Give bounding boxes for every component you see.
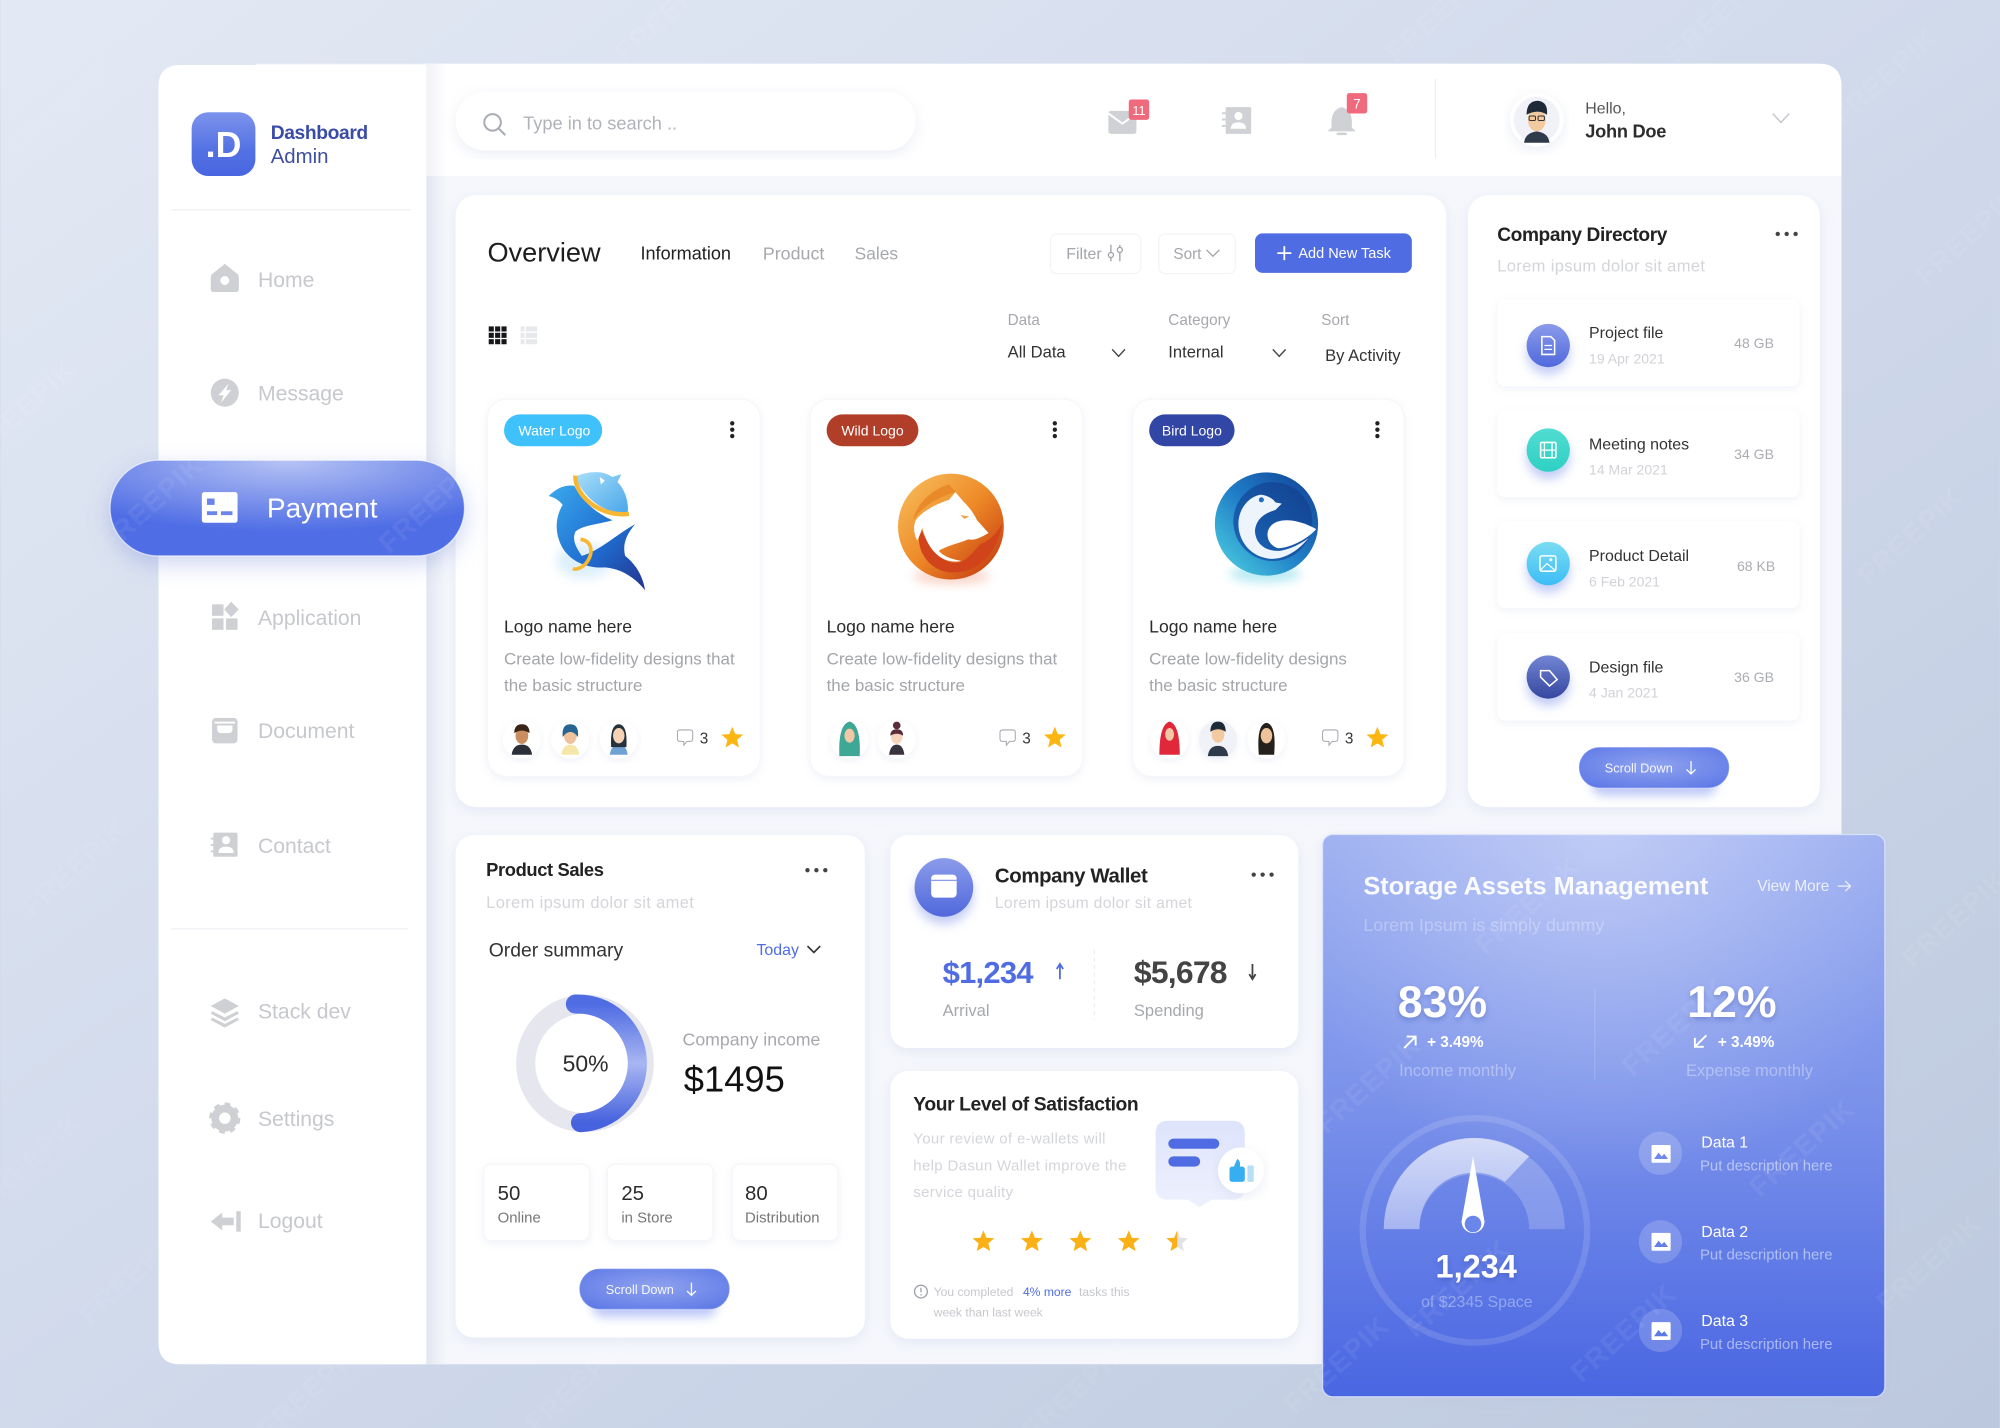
item: project file: [1497, 300, 1799, 386]
watermarks: FREEPIK: [1871, 1207, 1988, 1318]
menu: home: [211, 264, 314, 292]
logo: Admin: [271, 146, 328, 168]
item: meeting notes: 14 Mar 2021: [1589, 461, 1668, 477]
item: design file: [1497, 634, 1799, 720]
category dropdown: Category: [1168, 312, 1231, 329]
stat: expense: Expense monthly: [1686, 1061, 1814, 1080]
item: project file: 48 GB: [1734, 335, 1774, 351]
data item 1: Put description here: [1700, 1158, 1833, 1174]
data item 2: Put description here: [1700, 1248, 1833, 1264]
watermarks: FREEPIK: [1399, 1233, 1517, 1343]
view more link: View More: [1757, 878, 1829, 895]
panel: storage assets management: [1323, 834, 1885, 1397]
stat: distribution: [732, 1164, 838, 1241]
data item 3: Put description here: [1700, 1337, 1833, 1353]
item: project file: 19 Apr 2021: [1589, 350, 1665, 366]
card: wild logo: Wild Logo: [841, 422, 904, 438]
spending stat: Spending: [1134, 1001, 1204, 1020]
item: design file: 4 Jan 2021: [1589, 684, 1659, 700]
gauge chart: 1,234: [1436, 1249, 1517, 1285]
card: wild logo: [810, 399, 1083, 776]
watermarks: FREEPIK: [73, 1220, 191, 1330]
watermarks: FREEPIK: [1565, 1277, 1682, 1388]
stat: online: [484, 1164, 589, 1241]
card: water logo: Logo name here: [504, 616, 632, 636]
scroll down button: Scroll Down: [1605, 761, 1673, 776]
sort button: [1159, 234, 1235, 273]
data dropdown: [1008, 312, 1125, 362]
avatars: [503, 720, 638, 759]
menu: message: [211, 379, 344, 407]
stat: in store: 25: [621, 1183, 644, 1205]
stat: income: + 3.49%: [1427, 1034, 1484, 1051]
sort dropdown: Sort: [1321, 312, 1350, 329]
card: wild logo: 3: [1022, 730, 1031, 747]
watermarks: FREEPIK: [1852, 481, 1969, 591]
card: water logo: Water Logo: [518, 422, 591, 438]
chat illustration: [1156, 1121, 1264, 1207]
icon: bell with badge: 7: [1353, 96, 1361, 111]
tabs: Product: [763, 243, 824, 263]
card: water logo: the basic structure: [504, 676, 642, 695]
panel: overview: [456, 195, 1446, 807]
data item 3: Data 3: [1701, 1313, 1748, 1330]
spending stat: [1134, 954, 1256, 1020]
item: product detail: [1497, 521, 1799, 608]
data item 1: Data 1: [1701, 1135, 1748, 1152]
donut chart: [526, 1004, 644, 1123]
data item 2: [1639, 1220, 1833, 1264]
search box: Type in to search ..: [523, 112, 677, 133]
data dropdown: All Data: [1008, 343, 1066, 362]
item: design file: Design file: [1589, 660, 1664, 677]
item: meeting notes: [1497, 411, 1799, 497]
data item 3: [1639, 1309, 1833, 1353]
avatars: [830, 720, 916, 759]
stat: income: Income monthly: [1399, 1061, 1517, 1080]
menu: application: [212, 602, 361, 630]
menu: application: Application: [258, 607, 361, 630]
stat: in store: [607, 1164, 713, 1241]
panel: product sales: Product Sales: [486, 859, 604, 880]
menu: logout: [211, 1210, 323, 1233]
item: design file: 36 GB: [1734, 669, 1774, 685]
logo: [192, 112, 368, 176]
stat: online: Online: [498, 1211, 541, 1227]
icon: mail with badge: 11: [1132, 103, 1146, 118]
item: product detail: Product Detail: [1589, 548, 1689, 565]
card: water logo: Create low-fidelity designs that: [504, 649, 735, 668]
menu: contact: Contact: [258, 835, 331, 858]
panel: company wallet: [890, 835, 1298, 1048]
payment active pill: [110, 460, 465, 556]
menu: message: Message: [258, 382, 344, 405]
stat: in store: in Store: [621, 1211, 673, 1227]
footnote: You completed: [934, 1285, 1013, 1299]
icon: bell with badge: [1328, 93, 1367, 135]
panel: product sales: Order summary: [489, 939, 624, 961]
wallet icon: [915, 858, 973, 917]
panel: company directory: Lorem ipsum dolor sit amet: [1497, 257, 1705, 276]
item: product detail: 68 KB: [1737, 558, 1775, 574]
card: wild logo: Create low-fidelity designs that: [827, 649, 1058, 668]
card: wild logo: the basic structure: [827, 676, 965, 695]
scroll down button: [579, 1269, 730, 1317]
category dropdown: Internal: [1168, 343, 1224, 362]
card: bird logo: Bird Logo: [1162, 422, 1222, 438]
bird logo: [1215, 472, 1318, 583]
add new task button: Add New Task: [1298, 246, 1392, 262]
user profile: [1510, 93, 1789, 147]
stat: distribution: Distribution: [745, 1211, 820, 1227]
menu: stack dev: [211, 998, 351, 1028]
menu: settings: [211, 1104, 334, 1132]
menu: home: Home: [258, 269, 314, 292]
menu: settings: Settings: [258, 1108, 334, 1131]
item: project file: Project file: [1589, 325, 1664, 342]
card: bird logo: 3: [1345, 730, 1353, 747]
panel: storage assets management: Storage Assets Management: [1363, 872, 1709, 900]
main dashboard panel: [255, 64, 1841, 1364]
panel: level of satisfaction: help Dasun Wallet improve the: [913, 1157, 1127, 1174]
sort dropdown: By Activity: [1325, 346, 1401, 365]
panel: company directory: [1468, 195, 1820, 807]
watermarks: FREEPIK: [16, 812, 133, 922]
payment active pill: Payment: [267, 493, 378, 524]
data dropdown: Data: [1008, 312, 1040, 329]
watermarks: FREEPIK: [1278, 1309, 1396, 1420]
panel: level of satisfaction: [890, 1071, 1298, 1339]
logo: Dashboard: [271, 123, 368, 144]
panel: company wallet: Lorem ipsum dolor sit amet: [995, 895, 1193, 912]
panel: company wallet: Company Wallet: [995, 865, 1148, 887]
menu: stack dev: Stack dev: [258, 1001, 351, 1024]
add new task button: [1255, 233, 1412, 273]
watermarks: FREEPIK: [1469, 850, 1587, 961]
icon: contact book: [1222, 107, 1251, 134]
gauge chart: [1363, 1118, 1587, 1343]
watermarks: FREEPIK: [373, 449, 490, 559]
stat: expense: [1686, 978, 1814, 1080]
footnote: 4% more: [1023, 1285, 1072, 1299]
category dropdown: [1168, 312, 1286, 362]
user profile: John Doe: [1585, 121, 1666, 142]
stat: income: 83%: [1398, 978, 1487, 1027]
panel: product sales: Lorem ipsum dolor sit amet: [486, 893, 694, 912]
watermarks: FREEPIK: [1616, 971, 1733, 1082]
panel: product sales: Company income: [683, 1030, 821, 1050]
stat: expense: 12%: [1687, 978, 1777, 1027]
rating stars: [973, 1230, 1188, 1251]
gauge chart: of $2345 Space: [1421, 1294, 1533, 1311]
heading: Overview: [487, 236, 601, 267]
watermarks: FREEPIK: [3, 53, 121, 164]
menu: contact: [211, 833, 331, 858]
tabs: [640, 243, 898, 263]
sort dropdown: [1321, 312, 1401, 365]
scroll down button: Scroll Down: [606, 1282, 674, 1297]
wolf logo: [898, 474, 1004, 584]
data item 1: [1639, 1132, 1833, 1175]
tabs: Information: [640, 243, 731, 263]
panel: level of satisfaction: service quality: [913, 1184, 1013, 1201]
arrival stat: Arrival: [943, 1001, 990, 1020]
data item 2: Data 2: [1701, 1224, 1748, 1241]
user profile: Hello,: [1585, 100, 1626, 117]
donut chart: 50%: [563, 1051, 609, 1077]
view toggle icons: [489, 326, 537, 344]
footnote: tasks this: [1079, 1285, 1130, 1299]
panel: product sales: Today: [756, 942, 799, 959]
panel: storage assets management: Lorem Ipsum is simply dummy: [1363, 915, 1604, 935]
card: wild logo: Logo name here: [827, 616, 955, 636]
search box: [456, 92, 916, 150]
footnote: week than last week: [933, 1305, 1044, 1319]
panel: product sales: [456, 835, 865, 1337]
stat: income: [1398, 978, 1517, 1080]
card: bird logo: Create low-fidelity designs: [1149, 649, 1347, 668]
sort button: Sort: [1173, 246, 1202, 263]
item: meeting notes: Meeting notes: [1589, 436, 1689, 453]
watermarks: FREEPIK: [1310, 1029, 1427, 1139]
panel: level of satisfaction: Your Level of Satisfaction: [913, 1095, 1138, 1116]
footnote: [915, 1285, 1130, 1319]
logo: .D: [206, 125, 241, 165]
menu: document: [212, 718, 354, 743]
arrival stat: [943, 955, 1063, 1020]
fish logo: [549, 472, 645, 590]
watermarks: FREEPIK: [1826, 22, 1944, 132]
card: bird logo: Logo name here: [1149, 616, 1277, 636]
spending stat: $5,678: [1134, 954, 1227, 990]
sidebar: [158, 65, 426, 1364]
card: water logo: 3: [700, 730, 708, 747]
panel: level of satisfaction: Your review of e-wallets will: [913, 1131, 1106, 1148]
stat: distribution: 80: [745, 1183, 768, 1205]
watermarks: FREEPIK: [92, 449, 210, 559]
scroll down button: [1579, 747, 1729, 796]
menu: document: Document: [258, 720, 354, 743]
card: bird logo: the basic structure: [1149, 676, 1288, 695]
menu: logout: Logout: [258, 1210, 323, 1233]
tabs: Sales: [855, 243, 898, 263]
item: product detail: 6 Feb 2021: [1589, 574, 1660, 590]
panel: company directory: Company Directory: [1497, 225, 1668, 246]
filter button: [1050, 234, 1141, 273]
card: bird logo: [1133, 399, 1404, 776]
watermarks: FREEPIK: [1743, 1093, 1861, 1203]
avatars: [1150, 720, 1286, 759]
item: meeting notes: 34 GB: [1734, 446, 1774, 462]
stat: online: 50: [498, 1183, 520, 1205]
filter button: Filter: [1066, 246, 1102, 263]
arrival stat: $1,234: [943, 955, 1034, 990]
stat: expense: + 3.49%: [1718, 1034, 1775, 1051]
panel: product sales: $1495: [684, 1058, 785, 1099]
card: water logo: [487, 399, 760, 776]
icon: mail with badge: [1108, 99, 1149, 134]
